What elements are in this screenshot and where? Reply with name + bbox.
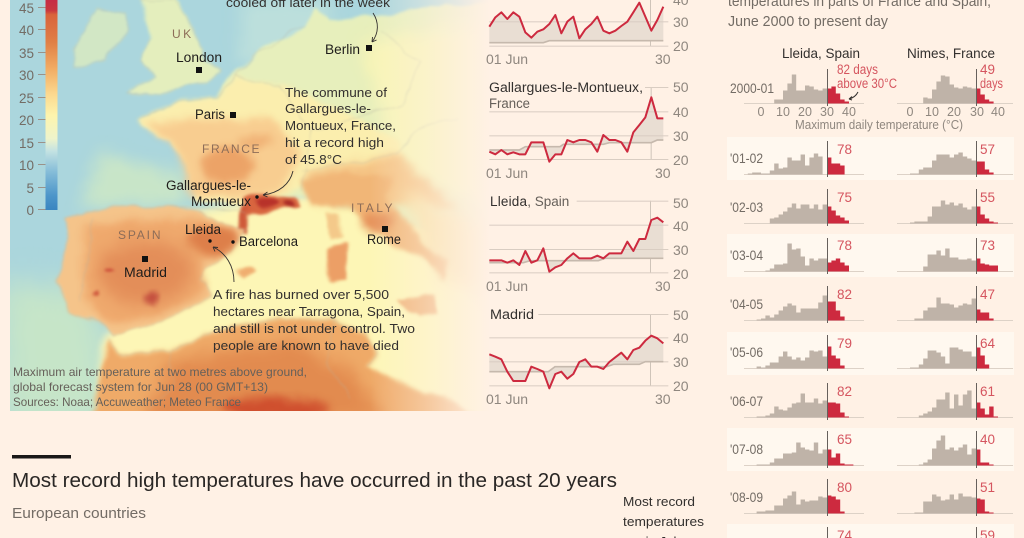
histogram row: 2007-08: 40 [980, 432, 995, 447]
map labels: cities: Gallargues-le- [166, 178, 251, 193]
histogram row: 2005-06 [727, 332, 1014, 375]
map labels: cities: Madrid [124, 265, 167, 280]
colour scale legend: 5 [26, 181, 34, 196]
histogram row: 2000-01: 20 [947, 105, 961, 119]
histogram row: 2008-09: 80 [837, 480, 852, 495]
histogram subtitle: June 2000 to present day [728, 13, 888, 30]
histogram row: 2000-01: 2000-01 [730, 80, 774, 96]
annotation: Tarragona fire: and still is not under control. Two [213, 321, 415, 336]
histogram row: 2004-05: '04-05 [730, 296, 763, 312]
colour scale legend: 40 [19, 23, 34, 38]
line chart: Lleida: Lleida, Spain [490, 194, 569, 209]
histogram row: 2004-05 [730, 286, 1013, 323]
histogram row: 2008-09 [730, 479, 1013, 516]
line chart: Gallargues-le-Montueux [486, 79, 689, 181]
map labels: countries: FRANCE [202, 142, 262, 156]
annotation: Tarragona fire: A fire has burned over 5,500 [213, 287, 389, 302]
histogram row: 2003-04: '03-04 [730, 247, 763, 263]
line chart: Madrid: Madrid [490, 307, 534, 322]
histogram row: 2002-03: 75 [837, 190, 852, 205]
annotation: Tarragona fire: hectares near Tarragona, Spain, [213, 304, 405, 319]
histogram row: 2006-07: 82 [837, 384, 852, 399]
histogram row: 2000-01: 0 [758, 105, 765, 119]
annotation: Gallargues-le-Montueux record high [263, 85, 396, 197]
histogram row: 2008-09: '08-09 [730, 489, 763, 505]
annotation: Gallargues-le-Montueux record high: hit a record high [285, 135, 384, 150]
histogram row: 2009-10 [727, 524, 1014, 538]
line chart: Gallargues-le-Montueux: 50 [673, 79, 689, 95]
histogram row: 2000-01: 30 [970, 105, 984, 119]
histogram row: 2001-02: '01-02 [730, 150, 763, 166]
annotation: Berlin heat note [226, 0, 391, 42]
map caption and sources: Sources: Noaa; Accuweather; Meteo France [13, 395, 241, 409]
map base colour fields [10, 0, 480, 411]
histogram row: 2003-04 [727, 234, 1014, 277]
map labels: countries [118, 27, 395, 242]
histogram column headers: Nimes, France [907, 45, 995, 61]
map labels: countries: SPAIN [118, 228, 163, 242]
map labels: cities: Berlin [325, 42, 360, 57]
histogram row: 2005-06: 79 [837, 336, 852, 351]
histogram row: 2001-02 [727, 137, 1014, 180]
colour scale legend: 30 [19, 68, 34, 83]
subheading: European countries: European countries [12, 506, 146, 522]
map labels: cities: London [176, 50, 222, 65]
map: air temperature across Europe [10, 0, 480, 411]
line chart: Gallargues-le-Montueux: France [489, 96, 530, 111]
histogram row: 2006-07: 61 [980, 384, 995, 399]
map labels: cities: Paris [195, 107, 225, 122]
map labels: countries: ITALY [351, 201, 395, 215]
map labels: cities: Lleida [185, 222, 221, 237]
histogram row: 2008-09: 51 [980, 480, 995, 495]
line chart: Madrid: 40 [673, 330, 689, 346]
line chart: Berlin: 01 Jun [486, 51, 528, 67]
line chart: Madrid [486, 307, 689, 407]
map caption and sources: global forecast system for Jun 28 (00 GMT+13) [13, 380, 268, 394]
colour scale legend: 0 [26, 203, 34, 218]
line chart: Berlin: 30 [655, 51, 671, 67]
line chart: Lleida: 01 Jun [486, 278, 528, 294]
colour scale legend: 25 [19, 91, 34, 106]
histogram row: 2002-03: '02-03 [730, 199, 763, 215]
histogram row: 2004-05: 82 [837, 287, 852, 302]
line chart: Lleida: 40 [673, 218, 689, 234]
line chart: Gallargues-le-Montueux: 01 Jun [486, 165, 528, 181]
histogram row: 2000-01: above 30°C [837, 76, 897, 91]
section rule and heading: record temperatures [12, 455, 617, 492]
histogram row: 2003-04: 73 [980, 238, 995, 253]
histogram row: 2004-05: 47 [980, 287, 995, 302]
histogram row: 2000-01: 0 [907, 105, 914, 119]
line chart: Madrid: 50 [673, 307, 689, 323]
colour scale legend: 20 [19, 113, 34, 128]
line chart: Gallargues-le-Montueux: 20 [673, 152, 689, 168]
histogram row: 2000-01: Maximum daily temperature (°C) [795, 118, 963, 132]
line chart: Berlin: 20 [673, 38, 689, 54]
histogram row: 2007-08: 65 [837, 432, 852, 447]
annotation: Gallargues-le-Montueux record high: Gallargues-le- [285, 101, 371, 116]
histogram row: 2000-01 [730, 62, 1013, 132]
line chart: Madrid: 30 [673, 354, 689, 370]
side note: record temperatures by month [623, 494, 705, 538]
map labels: countries: UK [172, 27, 194, 41]
annotation: Gallargues-le-Montueux record high: The commune of [285, 85, 387, 100]
histogram row: 2000-01: 40 [991, 105, 1005, 119]
colour scale legend: 35 [19, 46, 34, 61]
colour scale legend: 10 [19, 158, 34, 173]
line chart: Lleida: 20 [673, 266, 689, 282]
colour scale legend: 15 [19, 136, 34, 151]
line chart: Gallargues-le-Montueux: 30 [673, 128, 689, 144]
coast and border lines (decorative) [74, 10, 410, 408]
histogram row: 2007-08: '07-08 [730, 441, 763, 457]
histogram row: 2002-03: 55 [980, 190, 995, 205]
annotation: Tarragona fire [213, 247, 415, 353]
colour scale legend: 45 [19, 1, 34, 16]
histogram column headers [782, 45, 995, 61]
line chart: Lleida: 50 [673, 195, 689, 211]
histogram row: 2000-01: 82 days [837, 62, 878, 77]
line chart: Berlin [486, 0, 689, 67]
line chart: Madrid: 20 [673, 378, 689, 394]
line chart: Lleida [486, 194, 689, 294]
histogram row: 2007-08 [727, 428, 1014, 471]
line chart: Gallargues-le-Montueux: 40 [673, 104, 689, 120]
line chart: Gallargues-le-Montueux: 30 [655, 165, 671, 181]
map labels: cities [124, 42, 401, 280]
line chart: Gallargues-le-Montueux: Gallargues-le-Montueux, [489, 80, 643, 95]
histogram row: 2006-07 [730, 383, 1013, 420]
map labels: cities: Montueux [191, 194, 251, 209]
histogram row: 2001-02: 78 [837, 142, 852, 157]
map caption and sources: Maximum air temperature at two metres above ground, [13, 365, 307, 379]
map labels: cities: Rome [367, 232, 401, 247]
section rule and heading: record temperatures: Most record high temperatures have occurred in the past 20 years [12, 470, 617, 492]
line chart: Berlin: 30 [673, 14, 689, 30]
histogram row: 2000-01: 30 [820, 105, 834, 119]
histogram row: 2001-02: 57 [980, 142, 995, 157]
colour scale legend [19, 0, 58, 218]
side note: record temperatures by month: Most record [623, 494, 695, 509]
histogram row: 2000-01: days [980, 76, 1003, 91]
histogram row: 2002-03 [730, 189, 1013, 226]
histogram row: 2005-06: 64 [980, 336, 996, 351]
line chart: Lleida: 30 [655, 278, 671, 294]
histogram row: 2003-04: 78 [837, 238, 852, 253]
annotation: Gallargues-le-Montueux record high: Montueux, France, [285, 118, 396, 133]
histogram row: 2005-06: '05-06 [730, 344, 763, 360]
annotation: Tarragona fire: people are known to have died [213, 338, 399, 353]
line chart: Madrid: 01 Jun [486, 391, 528, 407]
annotation: Gallargues-le-Montueux record high: of 45.8°C [285, 152, 342, 167]
histogram row: 2000-01: 40 [842, 105, 856, 119]
histogram row: 2000-01: 49 [980, 62, 995, 77]
line chart: Madrid: 30 [655, 391, 671, 407]
histogram subtitle [728, 0, 991, 30]
map caption and sources [13, 365, 307, 409]
line chart: Lleida: 30 [673, 242, 689, 258]
histogram row: 2000-01: 20 [798, 105, 812, 119]
map labels: cities: Barcelona [239, 234, 298, 249]
histogram row: 2006-07: '06-07 [730, 393, 763, 409]
histogram row: 2000-01: 10 [776, 105, 790, 119]
histogram column headers: Lleida, Spain [782, 45, 860, 61]
histogram row: 2000-01: 10 [925, 105, 939, 119]
side note: record temperatures by month: temperatures [623, 514, 705, 529]
